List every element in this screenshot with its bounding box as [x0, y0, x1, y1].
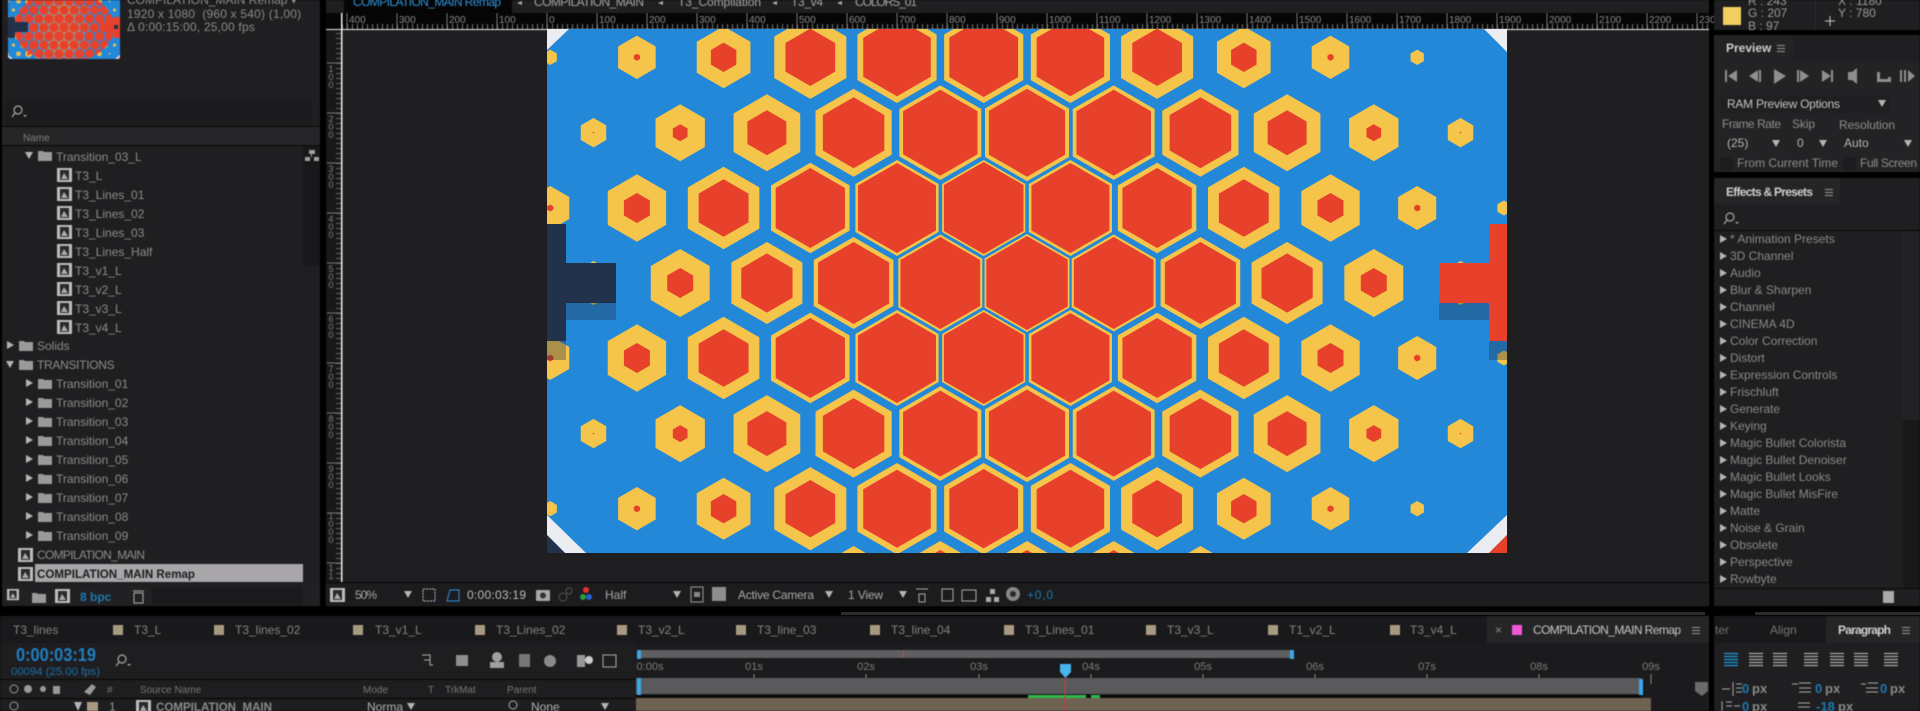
- hex row 8: [821, 541, 1233, 627]
- panel: preview: Resolution: [1839, 118, 1895, 132]
- project file tree: Transition_05: [56, 453, 129, 467]
- horizontal ruler: 1300: [1199, 15, 1222, 26]
- horizontal ruler: 0: [549, 15, 555, 26]
- vertical ruler: 0: [328, 230, 334, 240]
- vertical ruler: 0: [328, 130, 334, 140]
- effects list: Expression Controls: [1730, 368, 1837, 382]
- vertical ruler: 3: [328, 164, 334, 174]
- vertical ruler: 8: [328, 414, 334, 424]
- effects list: Magic Bullet Colorista: [1730, 436, 1846, 450]
- layer row 1: [10, 700, 609, 711]
- project file tree: T3_v4_L: [75, 321, 122, 335]
- RAM preview options: [1720, 96, 1890, 113]
- time ruler and work area: 04s: [1082, 661, 1100, 673]
- vertical ruler: 4: [328, 214, 334, 224]
- flowchart icon: [305, 150, 319, 161]
- vertical ruler: 0: [328, 430, 334, 440]
- paragraph spacing values: 0: [1742, 681, 1749, 696]
- horizontal ruler: 200: [449, 15, 466, 26]
- effects list: Magic Bullet MisFire: [1730, 487, 1838, 501]
- composition details: Δ 0:00:15:00, 25,00 fps: [127, 20, 255, 34]
- horizontal ruler: 700: [899, 15, 916, 26]
- panel: preview: Auto: [1844, 136, 1869, 150]
- effects list: CINEMA 4D: [1730, 317, 1795, 331]
- panel: preview: From Current Time: [1737, 156, 1838, 170]
- horizontal ruler: 200: [649, 15, 666, 26]
- layer column header: Parent: [507, 685, 537, 696]
- vertical ruler: 0: [328, 472, 334, 482]
- panel: paragraph: Paragraph: [1838, 623, 1891, 637]
- panel: info: [1714, 0, 1920, 33]
- project file tree: Transition_08: [56, 510, 129, 524]
- vertical ruler: 2: [328, 114, 334, 124]
- vertical ruler: 0: [328, 280, 334, 290]
- horizontal ruler: 1800: [1449, 15, 1472, 26]
- timeline tabs: T3_line_04: [891, 623, 951, 637]
- panel: info: G : 207: [1748, 6, 1788, 20]
- horizontal ruler: 300: [699, 15, 716, 26]
- viewer toolbar: 50%: [355, 588, 377, 602]
- project file tree: Solids: [37, 339, 70, 353]
- project file tree: T3_Lines_03: [75, 226, 145, 240]
- viewer toolbar: 0:00:03:19: [467, 588, 526, 602]
- project file tree: T3_v1_L: [75, 264, 122, 278]
- horizontal ruler: 1200: [1149, 15, 1172, 26]
- effects list: Generate: [1730, 402, 1780, 416]
- panel: paragraph: ter: [1715, 623, 1729, 637]
- horizontal ruler: 100: [599, 15, 616, 26]
- vertical ruler: 0: [328, 222, 334, 232]
- horizontal ruler: 400: [349, 15, 366, 26]
- effects list: 3D Channel: [1730, 249, 1793, 263]
- horizontal ruler: 600: [849, 15, 866, 26]
- effects list: Distort: [1730, 351, 1765, 365]
- project file tree: [6, 150, 303, 582]
- project footer toolbar: 8 bpc: [80, 590, 112, 604]
- project column header: [2, 126, 320, 146]
- project scrollbar: [303, 146, 320, 266]
- project file tree: T3_L: [75, 169, 103, 183]
- panel: info: B : 97: [1748, 19, 1780, 33]
- vertical ruler: 7: [328, 364, 334, 374]
- viewer toolbar: +0,0: [1027, 588, 1053, 602]
- horizontal ruler: 2100: [1599, 15, 1622, 26]
- panel: preview: Full Screen: [1860, 156, 1917, 170]
- paragraph spacing values: 0: [1880, 681, 1887, 696]
- project file tree: Transition_01: [56, 377, 129, 391]
- panel: paragraph: Align: [1770, 623, 1797, 637]
- panel gutter strips: [841, 612, 1920, 615]
- horizontal ruler: 1500: [1299, 15, 1322, 26]
- composition details: 1920 x 1080 (960 x 540) (1,00): [127, 7, 301, 21]
- vertical ruler: 0: [328, 80, 334, 90]
- paragraph spacing values: px: [1825, 681, 1841, 696]
- project footer toolbar: [2, 586, 320, 606]
- alignment icons: [1724, 654, 1898, 666]
- paragraph spacing values: px: [1752, 681, 1768, 696]
- vertical ruler: 5: [328, 264, 334, 274]
- effects list: Magic Bullet Denoiser: [1730, 453, 1847, 467]
- panel: preview: Skip: [1792, 117, 1815, 131]
- panel: timeline: [0, 616, 1709, 711]
- effects list: Noise & Grain: [1730, 521, 1805, 535]
- horizontal ruler: 2300: [1699, 15, 1722, 26]
- timeline tabs: T1_v2_L: [1289, 623, 1336, 637]
- panel: effects and presets: Effects & Presets: [1726, 185, 1813, 199]
- vertical ruler: 9: [328, 464, 334, 474]
- viewer toolbar: [326, 582, 1709, 606]
- vertical ruler: 0: [328, 122, 334, 132]
- horizontal ruler: 1700: [1399, 15, 1422, 26]
- effects list: * Animation Presets: [1730, 232, 1835, 246]
- effects list: Frischluft: [1730, 385, 1779, 399]
- vertical ruler: 6: [328, 314, 334, 324]
- horizontal ruler: 900: [999, 15, 1016, 26]
- horizontal ruler: 300: [399, 15, 416, 26]
- time ruler and work area: 07s: [1418, 661, 1436, 673]
- left transition bars: [547, 224, 616, 360]
- vertical ruler: 0: [328, 372, 334, 382]
- hexagon composition: [531, 12, 1510, 627]
- timeline tabs: T3_v4_L: [1410, 623, 1457, 637]
- effects list: Matte: [1730, 504, 1760, 518]
- hex row 4: [574, 234, 1480, 332]
- horizontal ruler: 1600: [1349, 15, 1372, 26]
- hex row 3: [531, 160, 1510, 256]
- horizontal ruler: 100: [499, 15, 516, 26]
- time ruler and work area: 02s: [857, 661, 875, 673]
- project file tree: COMPILATION_MAIN: [37, 548, 145, 562]
- hex row 2: [581, 84, 1473, 181]
- vertical ruler: 0: [328, 272, 334, 282]
- panel: preview: [1714, 35, 1920, 172]
- viewer tab strip: [326, 0, 1709, 13]
- vertical ruler: 1: [328, 563, 334, 573]
- project file tree: Transition_04: [56, 434, 129, 448]
- panel: preview: 0: [1797, 136, 1804, 150]
- project file tree: T3_Lines_02: [75, 207, 145, 221]
- vertical ruler: 0: [328, 72, 334, 82]
- layer column header: T: [428, 685, 434, 696]
- layer column header: TrkMat: [445, 685, 476, 696]
- horizontal ruler: 1100: [1099, 15, 1121, 26]
- vertical ruler: 1: [328, 64, 334, 74]
- vertical ruler: 0: [328, 480, 334, 490]
- vertical ruler: 0: [328, 330, 334, 340]
- effects list: [1720, 232, 1847, 586]
- vertical ruler: 0: [328, 380, 334, 390]
- time ruler and work area: 03s: [970, 661, 988, 673]
- horizontal ruler: 1400: [1249, 15, 1272, 26]
- paragraph spacing values: px: [1890, 681, 1906, 696]
- time ruler and work area: 09s: [1642, 661, 1660, 673]
- panel: project: [2, 0, 320, 606]
- project file tree: Transition_03: [56, 415, 129, 429]
- time ruler and work area: 06s: [1306, 661, 1324, 673]
- effects list: Perspective: [1730, 555, 1793, 569]
- composition details: [127, 0, 301, 34]
- project file tree: T3_v3_L: [75, 302, 122, 316]
- effects list: Keying: [1730, 419, 1767, 433]
- horizontal ruler: 800: [949, 15, 966, 26]
- project file tree: Transition_09: [56, 529, 129, 543]
- timeline tabs: T3_v3_L: [1167, 623, 1214, 637]
- project file tree: T3_Lines_01: [75, 188, 145, 202]
- timeline tabs: T3_L: [134, 623, 162, 637]
- timeline tabs: T3_v1_L: [375, 623, 422, 637]
- panel: preview: RAM Preview Options: [1727, 97, 1840, 111]
- paragraph spacing values: [1722, 681, 1906, 711]
- horizontal ruler: 500: [799, 15, 816, 26]
- time ruler and work area: 0:00s: [637, 661, 664, 673]
- time ruler and work area: 08s: [1530, 661, 1548, 673]
- project file tree: T3_v2_L: [75, 283, 122, 297]
- horizontal ruler: 2000: [1549, 15, 1572, 26]
- project file tree: Transition_06: [56, 472, 129, 486]
- effects list: Obsolete: [1730, 538, 1778, 552]
- project column header: Name: [23, 133, 50, 144]
- composition thumbnail: [7, 0, 121, 60]
- horizontal ruler: 1900: [1499, 15, 1522, 26]
- project file tree: TRANSITIONS: [37, 358, 115, 372]
- effects list: Rowbyte: [1730, 572, 1777, 586]
- vertical ruler: 0: [328, 535, 334, 545]
- current time indicator: [1060, 664, 1071, 711]
- project file tree: Transition_07: [56, 491, 129, 505]
- corner wedges: [547, 29, 1507, 553]
- timeline switches: [422, 652, 616, 668]
- transport controls: [1725, 68, 1915, 84]
- layer column header: Mode: [363, 685, 388, 696]
- timeline tabs: T3_Lines_02: [496, 623, 566, 637]
- layer column header: Source Name: [140, 685, 202, 696]
- vertical ruler: 0: [328, 172, 334, 182]
- timeline tabs: T3_Lines_01: [1025, 623, 1095, 637]
- hex row 1: [544, 12, 1424, 103]
- current time readout: 00094 (25.00 fps): [11, 666, 100, 678]
- viewer toolbar: Half: [605, 588, 627, 602]
- viewer toolbar: Active Camera: [738, 588, 814, 602]
- layer column header: [0, 679, 636, 699]
- vertical ruler: 1: [328, 571, 334, 581]
- effects list: Blur & Sharpen: [1730, 283, 1811, 297]
- panel: preview: (25): [1727, 136, 1748, 150]
- panel: preview: Preview: [1726, 41, 1772, 55]
- timeline tabs: T3_lines_02: [235, 623, 301, 637]
- vertical ruler: 1: [328, 511, 334, 521]
- timeline tabs: ×: [1495, 623, 1502, 637]
- vertical ruler: 0: [328, 527, 334, 537]
- hex row 5: [531, 310, 1510, 406]
- panel: preview: Frame Rate: [1722, 117, 1781, 131]
- timeline tabs: T3_lines: [13, 623, 58, 637]
- panel: info: Y : 780: [1838, 6, 1876, 20]
- layer column header: #: [107, 685, 113, 696]
- project file tree: Transition_02: [56, 396, 129, 410]
- vertical ruler: [326, 13, 342, 583]
- timeline tabs: T3_v2_L: [638, 623, 685, 637]
- vertical ruler: 0: [328, 519, 334, 529]
- effects list: Color Correction: [1730, 334, 1817, 348]
- vertical ruler: 0: [328, 180, 334, 190]
- horizontal ruler: 1000: [1049, 15, 1072, 26]
- hex row 7: [544, 463, 1424, 554]
- project search field: [5, 101, 312, 126]
- timeline tabs: [0, 616, 1709, 643]
- project file tree: T3_Lines_Half: [75, 245, 153, 259]
- effects list: Magic Bullet Looks: [1730, 470, 1831, 484]
- timeline tabs: T3_line_03: [757, 623, 817, 637]
- right transition bars: [1439, 224, 1507, 360]
- panel: paragraph: [1714, 616, 1920, 711]
- horizontal ruler: 400: [749, 15, 766, 26]
- current time readout: [11, 645, 131, 678]
- hex row 6: [581, 385, 1473, 482]
- project file tree: Transition_03_L: [56, 150, 142, 164]
- project file tree: COMPILATION_MAIN Remap: [37, 567, 195, 581]
- time ruler and work area: 01s: [745, 661, 763, 673]
- panel: composition viewer: [326, 0, 1722, 606]
- effects list: Channel: [1730, 300, 1775, 314]
- paragraph spacing values: 0: [1815, 681, 1822, 696]
- colour swatch: [1723, 7, 1741, 25]
- viewer toolbar: 1 View: [848, 588, 883, 602]
- current time readout: 0:00:03:19: [16, 645, 96, 665]
- timeline tabs: COMPILATION_MAIN Remap: [1533, 623, 1681, 637]
- vertical ruler: 0: [328, 322, 334, 332]
- time ruler and work area: [636, 643, 1709, 711]
- effects list: Audio: [1730, 266, 1761, 280]
- time ruler and work area: 05s: [1194, 661, 1212, 673]
- horizontal ruler: 2200: [1649, 15, 1672, 26]
- panel: effects and presets: [1714, 178, 1920, 606]
- horizontal ruler: [326, 13, 1722, 30]
- vertical ruler: 0: [328, 422, 334, 432]
